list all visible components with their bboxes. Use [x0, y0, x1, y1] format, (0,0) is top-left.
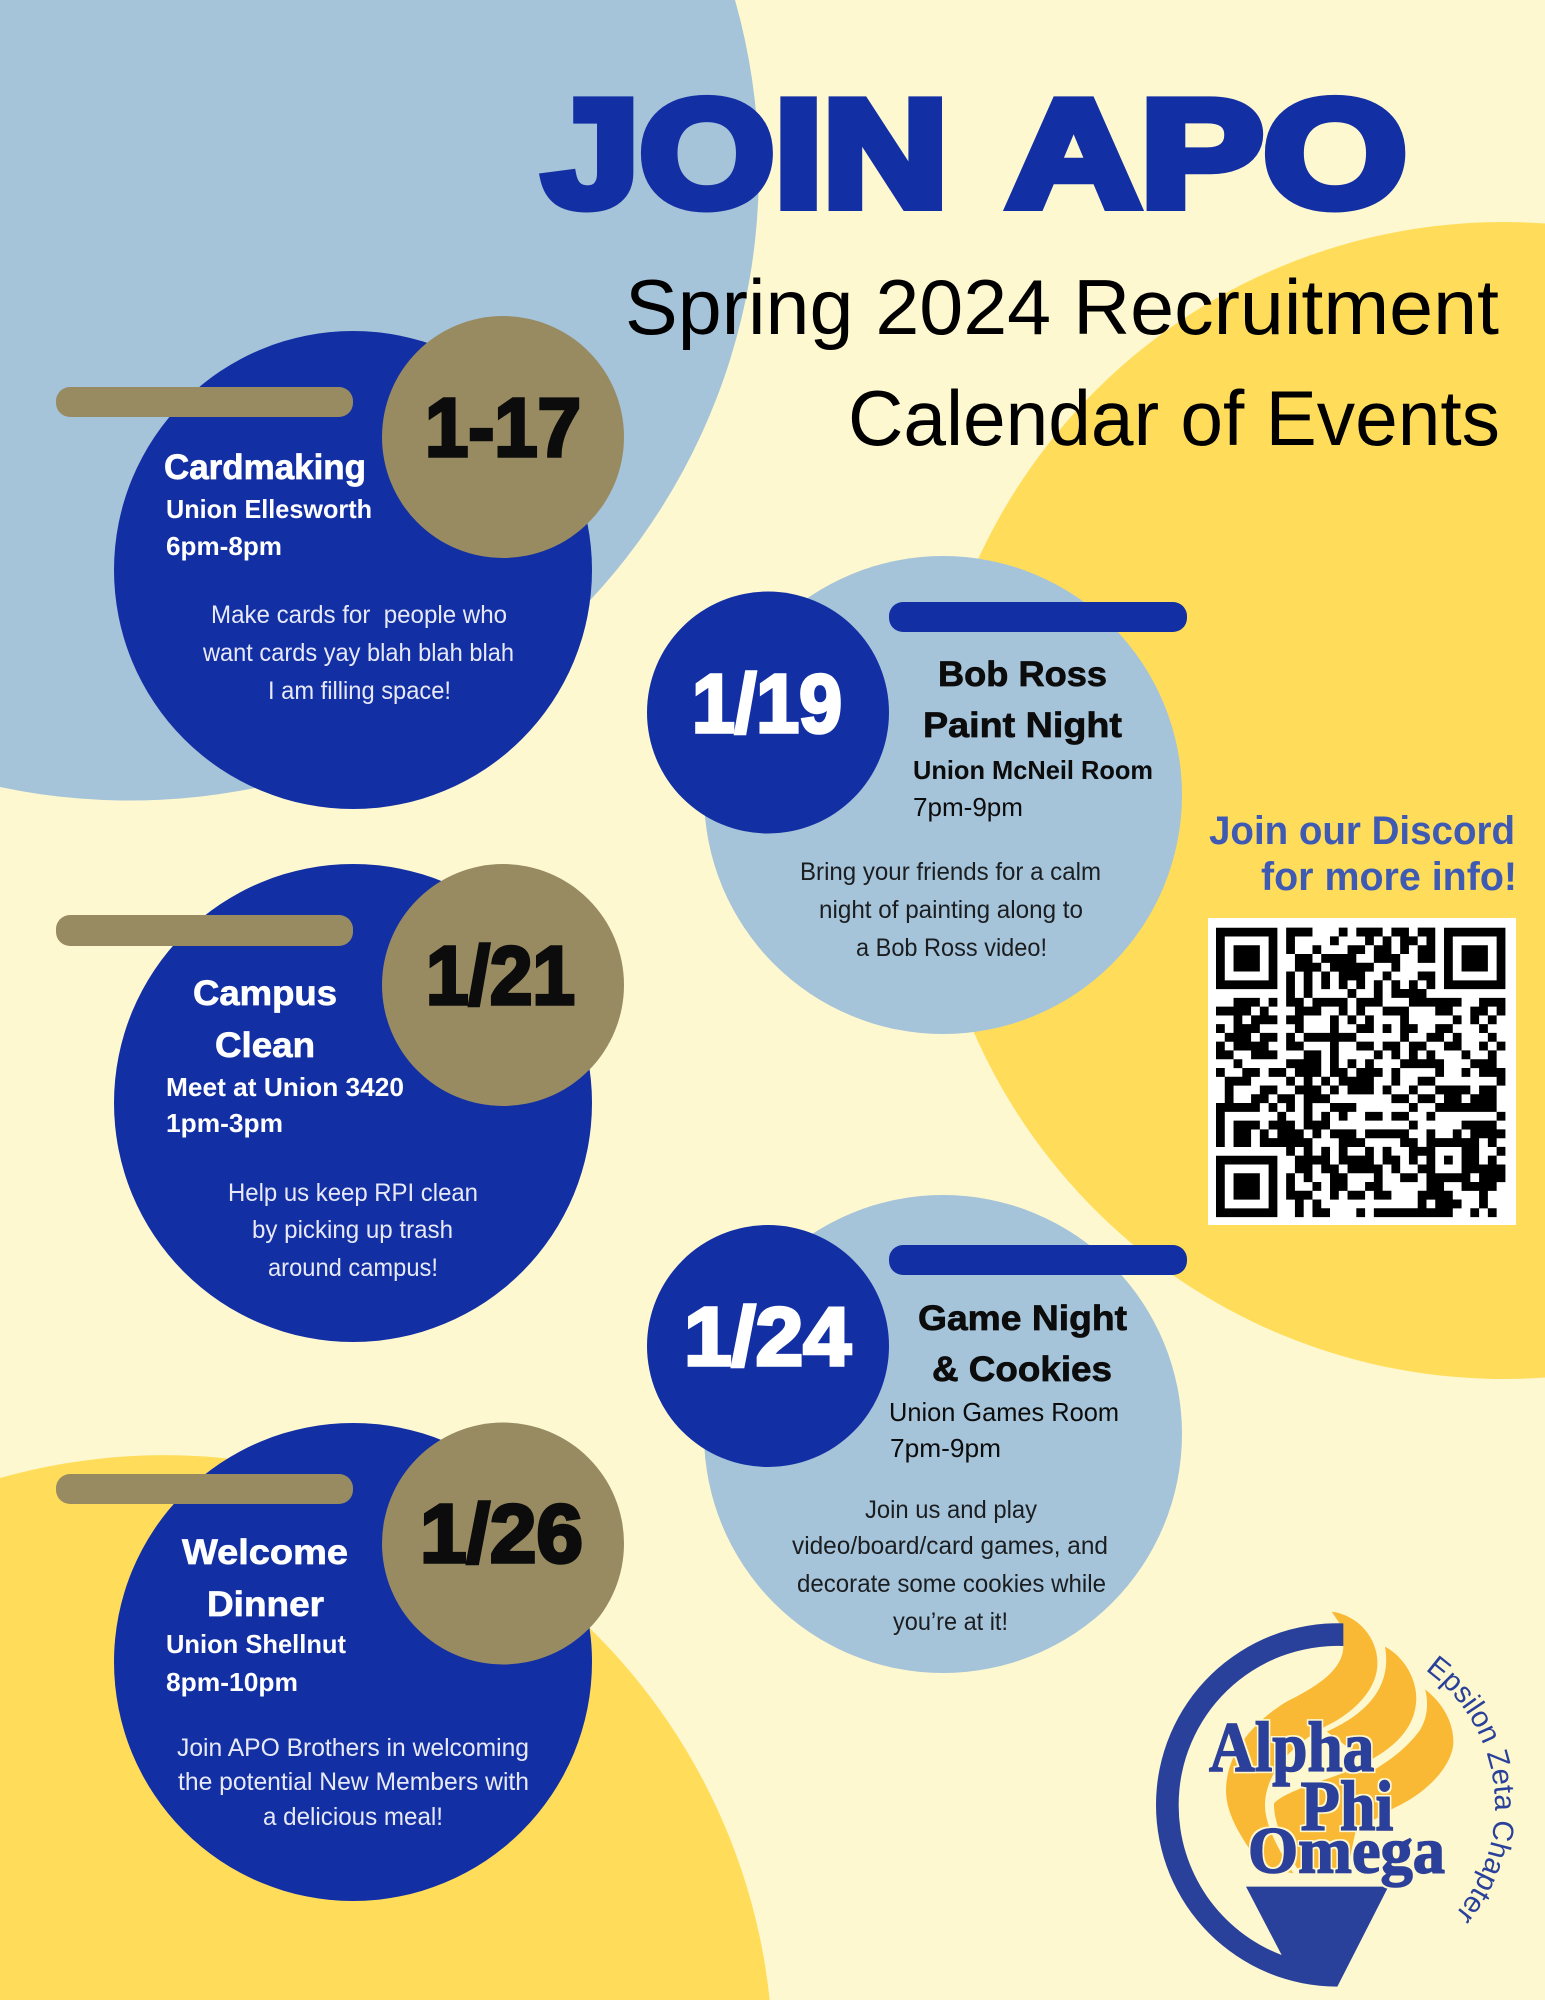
logo wordmark: Alpha [1209, 1709, 1374, 1787]
event name: & Cookies [932, 1350, 1112, 1389]
callout: Discord invitation: Join our Discord [1209, 809, 1515, 853]
date 1/24: 1/24 [684, 1290, 851, 1383]
title: APO [1007, 69, 1407, 239]
date 1/19: 1/19 [692, 657, 842, 750]
event name: Cardmaking [164, 448, 366, 487]
description: Bring your friends for a calm [800, 858, 1101, 886]
description [800, 858, 1101, 962]
description: a Bob Ross video! [856, 934, 1047, 962]
location and time: 1pm-3pm [166, 1108, 283, 1138]
description [228, 1179, 478, 1282]
location and time: Meet at Union 3420 [166, 1072, 404, 1102]
logo: Alpha Phi Omega torch [1156, 1612, 1514, 1987]
description: decorate some cookies while [797, 1570, 1106, 1598]
event name: Game Night [918, 1299, 1127, 1338]
callout: Discord invitation: for more info! [1261, 855, 1517, 899]
location and time: 6pm-8pm [166, 531, 282, 561]
description: video/board/card games, and [792, 1532, 1108, 1560]
location and time: Union Shellnut [166, 1629, 346, 1659]
callout: Discord invitation [1209, 809, 1517, 899]
QR code [1208, 918, 1516, 1225]
description: night of painting along to [819, 896, 1083, 924]
location and time: 7pm-9pm [913, 792, 1023, 822]
description: want cards yay blah blah blah [202, 639, 514, 667]
description: around campus! [268, 1254, 438, 1282]
icon: torch flames [1226, 1612, 1453, 1873]
event name [923, 655, 1122, 745]
description [177, 1734, 529, 1831]
panel: event 1/26 Welcome Dinner [56, 1422, 624, 1901]
event name [182, 1533, 348, 1624]
description: you’re at it! [893, 1608, 1008, 1636]
event name: Welcome [182, 1533, 348, 1572]
location and time: 8pm-10pm [166, 1667, 298, 1697]
subtitle: Spring 2024 Recruitment [625, 263, 1499, 351]
date 1-17: 1-17 [425, 381, 581, 474]
description: a delicious meal! [263, 1803, 443, 1831]
event name: Clean [215, 1026, 315, 1065]
panel: event 1-17 Cardmaking [56, 316, 624, 809]
panel: event 1/21 Campus Clean [56, 864, 624, 1342]
event name: Campus [193, 974, 337, 1013]
description [202, 601, 514, 705]
background circle: yellow bottom-left [0, 1455, 770, 2000]
location and time [166, 494, 372, 561]
location and time [889, 1397, 1119, 1463]
event name: Paint Night [923, 706, 1122, 745]
description: the potential New Members with [178, 1768, 529, 1796]
date 1/26: 1/26 [420, 1487, 583, 1580]
logo wordmark: Omega [1248, 1815, 1445, 1888]
subtitle: Calendar of Events [848, 374, 1500, 462]
description [792, 1496, 1108, 1636]
subtitle [625, 263, 1500, 462]
description: Help us keep RPI clean [228, 1179, 478, 1207]
title: JOIN [543, 69, 948, 239]
chapter name on curve: Epsilon Zeta Chapter [1427, 1656, 1514, 1924]
description: Join APO Brothers in welcoming [177, 1734, 529, 1762]
background circle: yellow right [925, 222, 1545, 1379]
description: by picking up trash [252, 1216, 453, 1244]
icon: torch ring and cup [1156, 1623, 1388, 1987]
event name [193, 974, 337, 1065]
event name [918, 1299, 1127, 1389]
panel: event 1/24 Game Night and Cookies [647, 1195, 1187, 1673]
date 1/21: 1/21 [426, 929, 575, 1022]
event name: Dinner [207, 1585, 324, 1624]
description: Join us and play [865, 1496, 1037, 1524]
location and time: Union Games Room [889, 1397, 1119, 1427]
location and time [166, 1072, 404, 1138]
panel: event 1/19 Bob Ross Paint Night [647, 556, 1187, 1034]
title [543, 69, 1407, 239]
logo wordmark: Phi [1301, 1768, 1393, 1846]
location and time [166, 1629, 346, 1697]
location and time: 7pm-9pm [890, 1433, 1001, 1463]
event name: Bob Ross [938, 655, 1107, 694]
location and time: Union McNeil Room [913, 755, 1153, 785]
description: I am filling space! [268, 677, 451, 705]
logo wordmark [1209, 1709, 1445, 1888]
location and time [913, 755, 1153, 822]
location and time: Union Ellesworth [166, 494, 372, 524]
description: Make cards for people who [211, 601, 507, 629]
background circle: light blue top-left [0, 0, 759, 801]
